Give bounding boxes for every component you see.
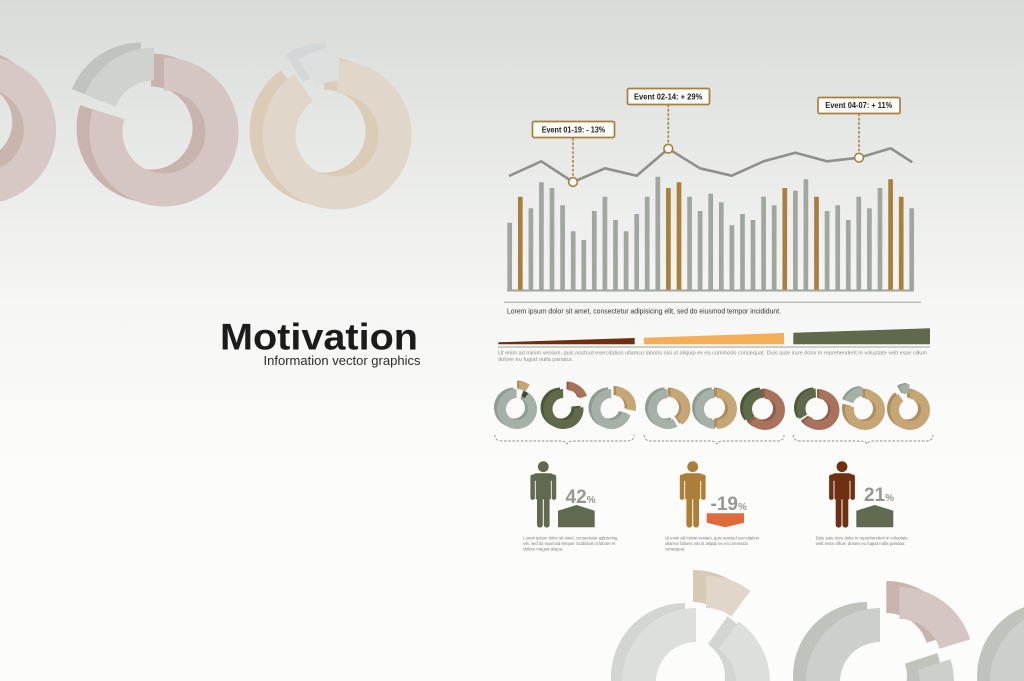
donut 8 [841,386,883,427]
donut 1 [492,384,539,431]
donut 7 [793,386,838,430]
callout: Event 04-07 [818,98,900,162]
wedge description text: dolore eu fugiat nulla pariatur. [498,357,573,363]
donut 3 [589,388,632,429]
caption 1: Lorem ipsum dolor sit amet, consectetur adipiscing [523,536,618,540]
down arrow block [707,513,744,527]
caption 1: dolore magna aliqua. [523,546,563,552]
bar chart [507,177,914,292]
up arrow block 2 [856,505,893,527]
caption 1 [523,536,618,552]
chart baseline [507,290,914,292]
background donut: far left [0,55,56,202]
donut 2 [544,386,584,426]
bracket 3 [793,435,933,444]
caption 1: elit, sed do eiusmod tempor incididunt ut labore et [523,541,616,546]
caption 3: velit esse cillum dolore eu fugiat nulla pariatur. [816,541,906,546]
title: Motivation [220,316,418,358]
caption 2: Ut enim ad minim veniam, quis nostrud exercitation [665,536,760,540]
callout: Event 04-07: Event 04-07: + 11% [825,100,893,110]
caption 2: consequat. [665,546,685,552]
donut 6 [738,386,785,431]
callout: Event 02-14: Event 02-14: + 29% [634,91,703,101]
wedge description text: Ut enim ad minim veniam, quis nostrud exercitation ullamco laboris nisi ut aliquip ex ea commodo consequat. Duis aute irure dolor in reprehenderit in voluptate velit esse cillum [498,350,927,356]
chart caption: Lorem ipsum dolor sit amet, consectetur adipisicing elit, sed do eiusmod tempor incididunt. [507,306,781,316]
wedge baseline [498,346,930,348]
up arrow block 1 [558,505,595,527]
background donut: bottom grey with rose piece [793,581,970,681]
person 2 icon [682,461,703,525]
callout: Event 01-19 [532,122,614,186]
stat: 42%: 42% [566,487,596,508]
callout: Event 02-14 [628,88,710,153]
highlighted brown bars [520,179,901,290]
background donut: tan with pale piece [246,37,419,202]
wedge: orange [644,333,784,344]
wedge bars [498,328,930,348]
person 3 icon [831,461,853,525]
trend line [509,148,912,182]
donut 5 [696,392,732,424]
donut 4 [644,387,689,430]
person 1 icon [533,461,554,525]
caption 3: Duis aute irure dolor in reprehenderit in voluptate [816,536,908,540]
grey bars [510,177,912,290]
stat: -19%: -19% [710,494,747,515]
callout: Event 01-19: Event 01-19: - 13% [542,125,606,135]
caption 2: ullamco laboris nisi ut aliquip ex ea commodo [665,541,749,546]
wedge description text [498,350,927,363]
caption 2 [665,536,760,552]
donut group 3 [793,382,931,430]
subtitle: Information vector graphics [264,353,421,368]
stat: 21%: 21% [864,485,894,506]
donut 9 [886,382,931,426]
donut group 1 [492,384,632,431]
background donut: bottom pale grey with tan piece [611,570,770,681]
bracket 1 [495,435,634,444]
caption 3 [816,536,908,546]
divider under chart [504,302,921,303]
wedge: dark brown [498,338,635,344]
background donut: rose with grey piece [65,41,230,198]
bracket 2 [644,435,784,444]
background donut: bottom right edge [977,607,1024,681]
donut group 2 [644,386,785,431]
wedge: olive [793,328,930,344]
